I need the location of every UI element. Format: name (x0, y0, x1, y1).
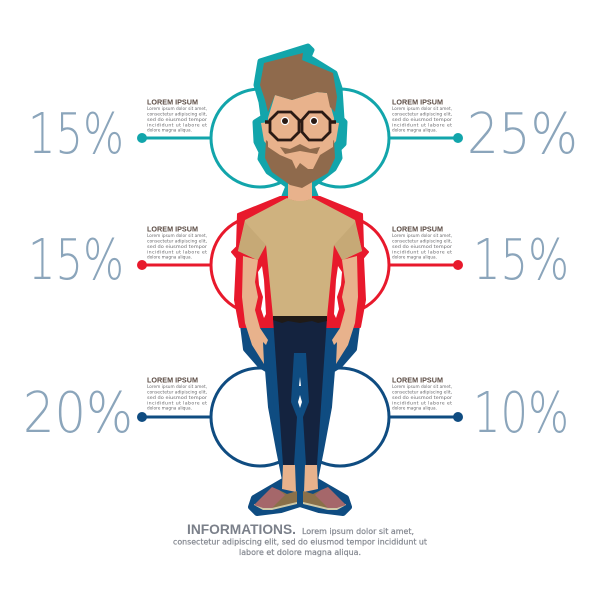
pants (273, 318, 327, 465)
text block bottom right (392, 376, 452, 412)
text block bottom left: sed do eiusmod tempor (147, 395, 207, 401)
text block middle right: dolore magna aliqua. (392, 255, 437, 261)
text block bottom left: LOREM IPSUM (147, 376, 198, 384)
belt (273, 316, 327, 323)
text block bottom left: incididunt ut labore et (147, 400, 207, 406)
text block middle left: sed do eiusmod tempor (147, 244, 207, 250)
figure (232, 46, 368, 513)
text block middle left: consectetur adipiscing elit, (147, 238, 207, 244)
neck (288, 180, 312, 202)
eyes (281, 117, 318, 125)
connector bottom right (291, 368, 463, 466)
red torso outline (232, 197, 368, 327)
leg gap highlights (298, 377, 302, 408)
text block top right: incididunt ut labore et (392, 122, 452, 128)
face (268, 92, 334, 169)
footer text: consectetur adipiscing elit, sed do eiusmod tempor incididunt ut (173, 538, 427, 546)
teal head outline (255, 46, 345, 196)
percent 15% middle left: 15% (28, 228, 124, 293)
text block top right: sed do eiusmod tempor (392, 117, 452, 123)
text block top left: LOREM IPSUM (147, 98, 198, 106)
text block middle right: sed do eiusmod tempor (392, 244, 452, 250)
right shoe (303, 487, 346, 510)
text block bottom left: Lorem ipsum dolor sit amet, (147, 384, 207, 390)
footer text: labore et dolore magna aliqua. (239, 548, 361, 557)
white gaps beside torso (258, 266, 342, 318)
text block bottom left (147, 376, 207, 412)
text block top right: Lorem ipsum dolor sit amet, (392, 106, 452, 112)
text block bottom right: sed do eiusmod tempor (392, 395, 452, 401)
text block bottom right: dolore magna aliqua. (392, 406, 437, 412)
ears (261, 122, 339, 147)
text block middle left: LOREM IPSUM (147, 224, 198, 234)
text block bottom right: incididunt ut labore et (392, 400, 452, 406)
text block bottom right: Lorem ipsum dolor sit amet, (392, 384, 452, 390)
text block top left (147, 98, 207, 134)
text block bottom right: LOREM IPSUM (392, 376, 443, 384)
footer heading: INFORMATIONS. (187, 521, 296, 537)
percent 15% middle right: 15% (473, 228, 569, 293)
arms (242, 256, 358, 364)
text block top right: LOREM IPSUM (392, 98, 443, 106)
shirt (238, 198, 362, 317)
text block top right: dolore magna aliqua. (392, 128, 437, 134)
connector top right (291, 89, 463, 187)
text block middle right: incididunt ut labore et (392, 249, 452, 255)
beard (265, 140, 335, 188)
text block middle right: consectetur adipiscing elit, (392, 238, 452, 244)
navy lower body outline (243, 325, 357, 513)
glasses (265, 112, 336, 140)
footer text (173, 527, 427, 557)
text block middle left: Lorem ipsum dolor sit amet, (147, 233, 207, 239)
text block bottom left: dolore magna aliqua. (147, 406, 192, 412)
connector middle left (137, 216, 309, 314)
text block middle left: dolore magna aliqua. (147, 255, 192, 261)
hair (260, 53, 337, 112)
text block top left: incididunt ut labore et (147, 122, 207, 128)
left shoe (254, 487, 297, 510)
text block top left: dolore magna aliqua. (147, 128, 192, 134)
footer text: Lorem ipsum dolor sit amet, (302, 527, 414, 536)
connector middle right (291, 216, 463, 314)
moustache (280, 144, 320, 154)
text block top left: consectetur adipiscing elit, (147, 112, 207, 118)
text block middle left (147, 224, 207, 261)
percent 25% top right: 25% (467, 102, 578, 167)
legs (282, 465, 318, 492)
text block bottom right: consectetur adipiscing elit, (392, 390, 452, 396)
text block middle right: Lorem ipsum dolor sit amet, (392, 233, 452, 239)
text block bottom left: consectetur adipiscing elit, (147, 390, 207, 396)
percent 15% top left: 15% (28, 102, 124, 167)
text block middle right: LOREM IPSUM (392, 224, 443, 234)
text block top right (392, 98, 452, 134)
percent 20% bottom left: 20% (23, 381, 133, 446)
text block middle left: incididunt ut labore et (147, 249, 207, 255)
connector top left (137, 89, 309, 187)
percent 10% bottom right: 10% (473, 381, 569, 446)
text block top left: Lorem ipsum dolor sit amet, (147, 106, 207, 112)
text block top left: sed do eiusmod tempor (147, 117, 207, 123)
shirt sleeves shading (238, 222, 362, 260)
text block top right: consectetur adipiscing elit, (392, 112, 452, 118)
text block middle right (392, 224, 452, 261)
connector bottom left (137, 368, 309, 466)
